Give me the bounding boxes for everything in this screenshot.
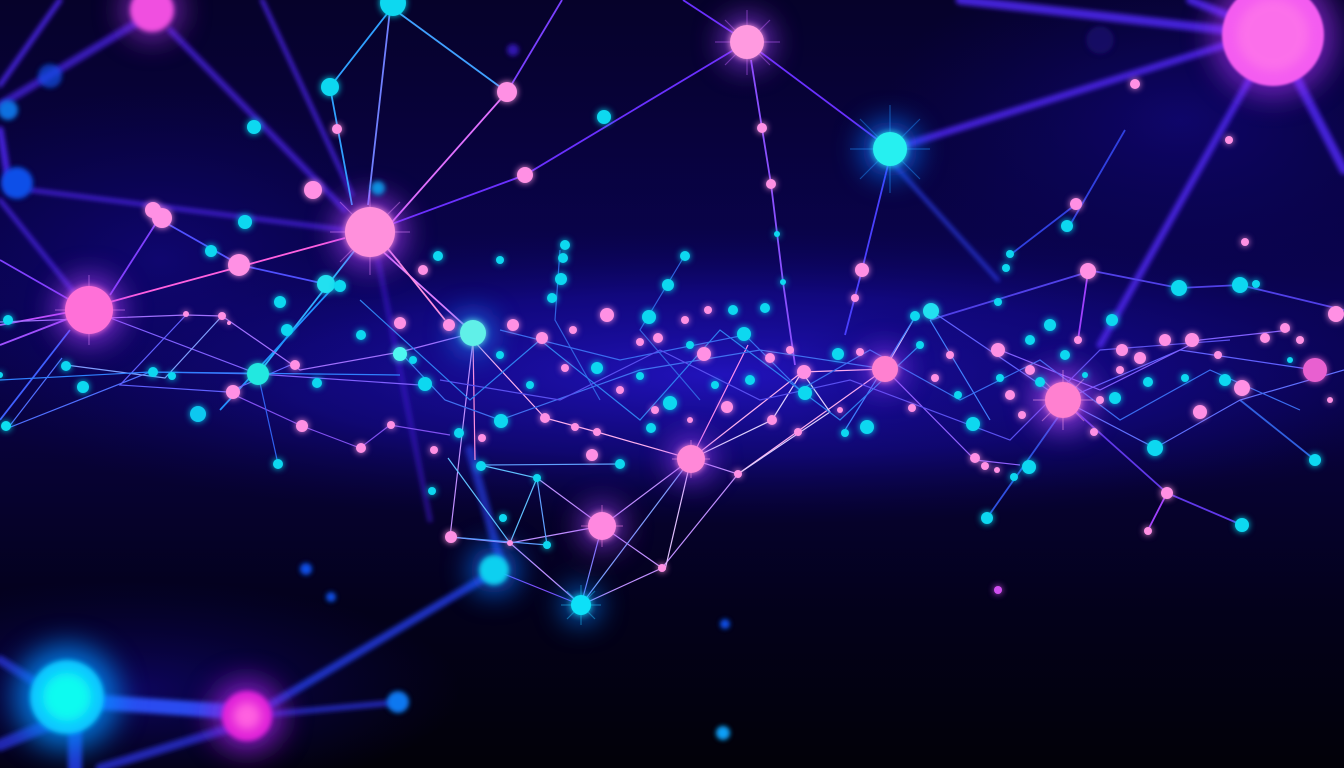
- starburst rays on key nodes: [55, 10, 1093, 625]
- thin upper network edges: [0, 0, 1344, 530]
- small cyan and blue nodes: [0, 0, 1321, 549]
- small pink nodes: [1, 79, 1344, 594]
- blurred out-of-focus blue nodes: [0, 26, 1114, 740]
- thin lower mesh edges: [0, 250, 1344, 605]
- primary in-focus nodes: [65, 25, 1327, 615]
